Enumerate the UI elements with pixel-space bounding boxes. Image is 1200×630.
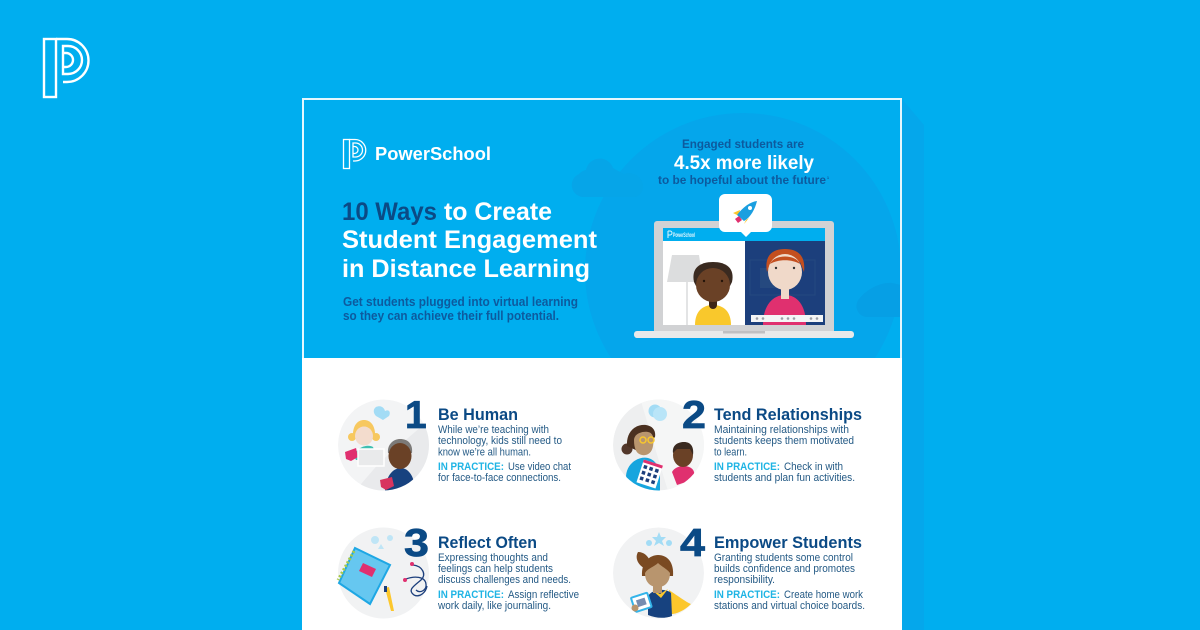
number 4: 4 xyxy=(680,522,705,565)
screen header xyxy=(663,228,825,241)
illustration 1 xyxy=(338,400,429,492)
in practice: IN PRACTICE: xyxy=(714,461,780,473)
in practice: Create home work xyxy=(784,589,863,601)
in practice xyxy=(714,589,865,612)
in practice: Check in with xyxy=(784,461,843,473)
description: Expressing thoughts and xyxy=(438,552,548,564)
panel: document page xyxy=(302,98,902,630)
heading: Be Human xyxy=(438,405,518,424)
in practice: for face-to-face connections. xyxy=(438,472,561,484)
description xyxy=(714,552,855,586)
number 1: 1 xyxy=(405,394,427,437)
description: feelings can help students xyxy=(438,563,553,575)
description: Granting students some control xyxy=(714,552,853,564)
heading: Reflect Often xyxy=(438,533,537,552)
description xyxy=(714,424,854,458)
laptop base xyxy=(634,331,854,338)
illustration 4 xyxy=(613,528,704,618)
laptop lid xyxy=(654,221,834,331)
item 4: Empower Students xyxy=(613,522,865,618)
description: know we’re all human. xyxy=(438,446,531,458)
in practice xyxy=(438,461,571,484)
in practice: Use video chat xyxy=(508,461,571,473)
description: to learn. xyxy=(714,446,747,458)
number 2: 2 xyxy=(682,394,706,437)
stat callout xyxy=(658,137,830,187)
heading: Empower Students xyxy=(714,533,862,552)
item 1: Be Human xyxy=(338,394,571,492)
title: in Distance Learning xyxy=(342,255,590,283)
in practice: IN PRACTICE: xyxy=(438,461,504,473)
screen header: PowerSchool xyxy=(673,233,695,239)
illustration 2 xyxy=(613,398,706,492)
item 3: Reflect Often xyxy=(338,522,579,618)
in practice: IN PRACTICE: xyxy=(438,589,504,601)
subtitle xyxy=(343,295,578,323)
panel: blue header xyxy=(302,98,902,358)
description: students keeps them motivated xyxy=(714,435,854,447)
brand name: PowerSchool xyxy=(375,144,491,164)
description: builds confidence and promotes xyxy=(714,563,855,575)
number 3: 3 xyxy=(404,522,429,565)
icon: small logo xyxy=(344,140,366,168)
subtitle: Get students plugged into virtual learning xyxy=(343,295,578,309)
stat callout: Engaged students are xyxy=(682,137,804,151)
title: Student Engagement xyxy=(342,226,598,254)
stat callout: to be hopeful about the future xyxy=(658,175,826,187)
title: 10 Ways xyxy=(342,198,437,226)
in practice: IN PRACTICE: xyxy=(714,589,780,601)
in practice: Assign reflective xyxy=(508,589,579,601)
stat callout: 4.5x more likely xyxy=(674,153,814,174)
in practice xyxy=(714,461,855,484)
illustration: laptop video call xyxy=(634,194,854,338)
title xyxy=(342,198,598,283)
description xyxy=(438,552,571,586)
border of header xyxy=(303,99,901,358)
left video pane xyxy=(663,241,745,325)
icon: PowerSchool P logo xyxy=(44,39,88,97)
description: While we’re teaching with xyxy=(438,424,549,436)
subtitle: so they can achieve their full potential. xyxy=(343,309,559,323)
page drop shadow xyxy=(901,98,924,630)
title: to Create xyxy=(444,198,552,226)
in practice: students and plan fun activities. xyxy=(714,472,855,484)
item 2: Tend Relationships xyxy=(613,394,862,492)
right video pane xyxy=(745,241,825,325)
description: discuss challenges and needs. xyxy=(438,574,571,586)
stat callout: 1 xyxy=(827,175,830,180)
background decoration xyxy=(572,158,900,317)
illustration 3 xyxy=(338,528,429,618)
in practice xyxy=(437,589,579,612)
heading: Tend Relationships xyxy=(714,405,862,424)
description: Maintaining relationships with xyxy=(714,424,849,436)
description xyxy=(438,424,562,458)
description: technology, kids still need to xyxy=(438,435,562,447)
in practice: work daily, like journaling. xyxy=(437,600,551,612)
in practice: stations and virtual choice boards. xyxy=(714,600,865,612)
description: responsibility. xyxy=(714,574,775,586)
speech bubble with rocket xyxy=(719,194,772,237)
